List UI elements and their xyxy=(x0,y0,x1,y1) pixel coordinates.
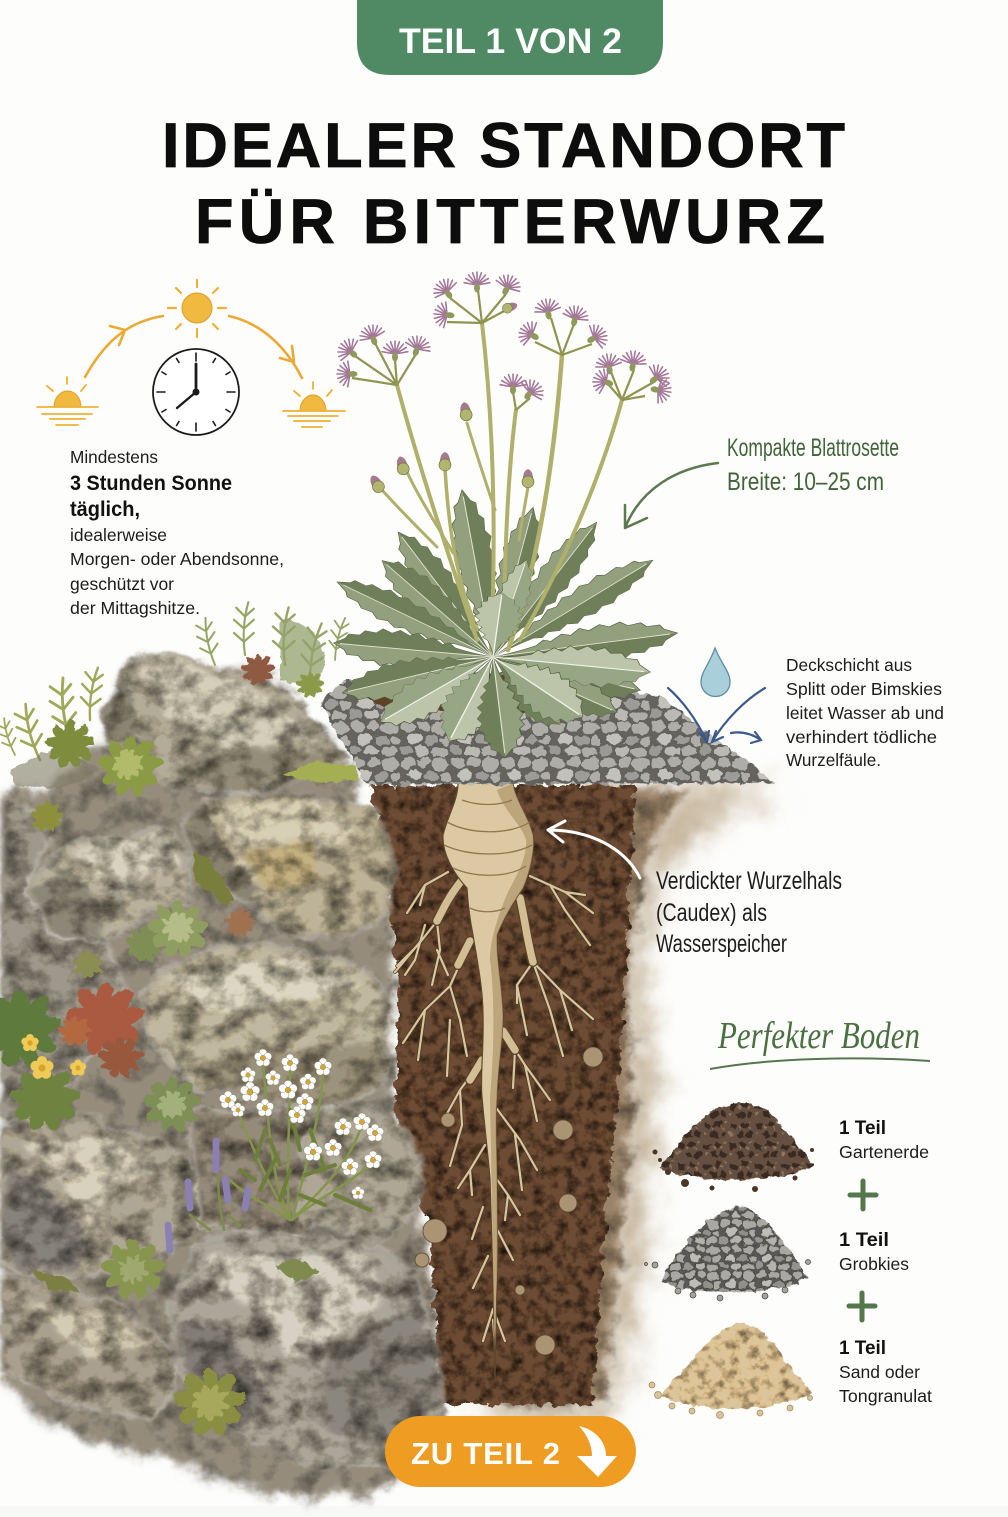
callout: top layer of grit xyxy=(668,648,944,770)
text: sun requirement: geschützt vor xyxy=(70,574,174,594)
plant: purple flowers xyxy=(168,1138,248,1250)
callout: top layer of grit: Deckschicht aus xyxy=(786,655,912,675)
arrows: water run-off xyxy=(668,688,765,743)
flowers: yellow xyxy=(21,1034,86,1079)
pile: sand xyxy=(649,1322,812,1418)
text: part gravel: 1 Teil xyxy=(839,1230,889,1251)
text: sun requirement: 3 Stunden Sonne xyxy=(70,472,232,495)
text: sun requirement xyxy=(70,447,284,618)
rock: left xyxy=(25,830,190,943)
pile: garden soil xyxy=(652,1103,815,1192)
icon: plus xyxy=(849,1293,875,1320)
callout: top layer of grit: Wurzelfäule. xyxy=(786,750,881,770)
callout: top layer of grit: verhindert tödliche xyxy=(786,727,937,747)
plant: middle moss and red leaves xyxy=(72,900,256,980)
button: to part 2 xyxy=(385,1416,636,1487)
badge: part 1 of 2 xyxy=(357,0,663,75)
wall plants xyxy=(0,602,384,1437)
text: sun requirement: idealerweise xyxy=(70,525,167,545)
icon: midday sun xyxy=(168,280,226,337)
callout: top layer of grit: Splitt oder Bimskies xyxy=(786,679,942,699)
dark soil column xyxy=(372,785,636,1405)
callout: caudex: Wasserspeicher xyxy=(656,930,787,958)
text: part sand: Sand oder xyxy=(839,1362,920,1382)
stone wall xyxy=(0,651,447,1470)
plant: white flowering shrub xyxy=(219,1049,384,1220)
callout: leaf rosette xyxy=(625,434,899,528)
title: IDEALER STANDORT xyxy=(162,111,845,181)
rock: small right xyxy=(300,1107,425,1240)
callout: caudex xyxy=(548,821,842,958)
title: FÜR BITTERWURZ xyxy=(195,187,825,257)
text: part garden soil: 1 Teil xyxy=(839,1118,886,1139)
brown soil edge wash xyxy=(480,785,700,1405)
rock: lower left xyxy=(0,1113,197,1277)
bottom strip xyxy=(0,1506,1008,1517)
rock: second xyxy=(183,792,395,937)
text: part garden soil: Gartenerde xyxy=(839,1142,929,1162)
soil pebbles xyxy=(407,1047,603,1355)
arrow: rising sun path xyxy=(85,316,163,377)
panel: perfect soil xyxy=(644,1015,932,1418)
icon: clock xyxy=(153,349,239,435)
arrow: setting sun path xyxy=(229,316,302,378)
icon: water drop xyxy=(701,648,730,696)
title xyxy=(162,111,845,257)
plant: red foliage xyxy=(0,982,202,1133)
heading xyxy=(710,1015,930,1069)
rock: middle xyxy=(140,943,388,1110)
button: to part 2: ZU TEIL 2 xyxy=(411,1436,560,1471)
pile: coarse gravel xyxy=(644,1207,810,1301)
heading: Perfekter Boden xyxy=(717,1015,920,1057)
icon: sunrise xyxy=(37,377,98,425)
gravel mound with plant base xyxy=(320,672,775,785)
text: sun requirement: täglich, xyxy=(70,498,140,521)
text: sun requirement: der Mittagshitze. xyxy=(70,598,200,618)
flower stems xyxy=(382,323,622,650)
text: part sand: Tongranulat xyxy=(839,1386,932,1406)
pale soil edge wash xyxy=(480,786,785,1420)
rock: top xyxy=(100,651,350,795)
text: sun requirement: Mindestens xyxy=(70,447,158,467)
plant: Bitterwurz xyxy=(330,271,680,760)
icon: plus xyxy=(850,1181,876,1209)
taproot with caudex xyxy=(395,783,593,1378)
callout: leaf rosette: Kompakte Blattrosette xyxy=(727,434,899,462)
plant: moss top sprigs xyxy=(193,602,350,698)
rock: big bottom xyxy=(170,1230,447,1470)
icon: sunset xyxy=(283,382,345,427)
rock: bottom left xyxy=(0,1277,177,1420)
callout: top layer of grit: leitet Wasser ab und xyxy=(786,703,944,723)
text: part sand: 1 Teil xyxy=(839,1338,886,1359)
arrow: to caudex xyxy=(548,821,640,878)
text: part sand xyxy=(839,1338,932,1406)
stone wall backdrop xyxy=(0,660,447,1498)
badge: part 1 of 2: TEIL 1 VON 2 xyxy=(399,22,622,61)
rock: behind shrub xyxy=(190,1105,310,1235)
text: part garden soil xyxy=(839,1118,929,1162)
text: sun requirement: Morgen- oder Abendsonne, xyxy=(70,549,284,569)
text: part gravel: Grobkies xyxy=(839,1254,909,1274)
arrow: to rosette xyxy=(625,463,718,528)
plant: bottom sprigs xyxy=(30,1239,320,1437)
back leaves xyxy=(330,486,661,671)
sun path diagram xyxy=(37,280,345,435)
rock: left edge xyxy=(0,800,130,1120)
text: part gravel xyxy=(839,1230,909,1274)
icon: curved down arrow xyxy=(577,1426,617,1477)
front leaves xyxy=(332,555,680,760)
thick root branches xyxy=(437,880,533,1080)
callout: caudex: (Caudex) als xyxy=(656,899,767,927)
callout: caudex: Verdickter Wurzelhals xyxy=(656,867,842,895)
flower heads xyxy=(333,271,674,495)
callout: leaf rosette: Breite: 10–25 cm xyxy=(727,468,884,496)
plant: left sprigs xyxy=(0,666,360,905)
